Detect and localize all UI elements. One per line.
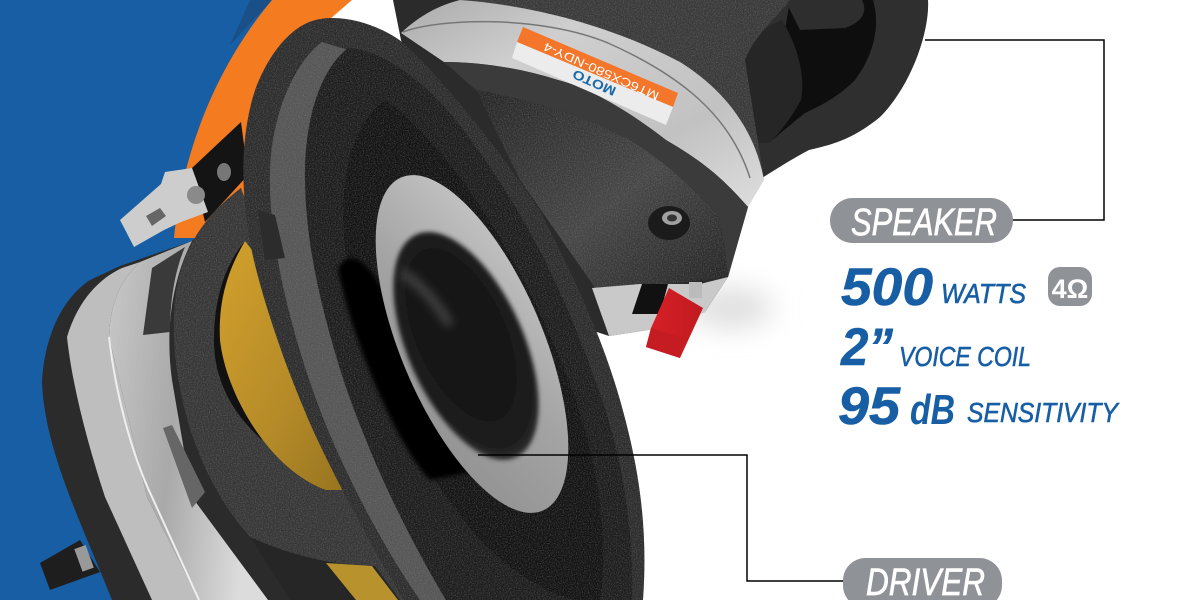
icon: 4 ohm badge: [1048, 267, 1092, 306]
product label: MOTO: [570, 67, 618, 99]
surround: [305, 48, 632, 600]
foam band: [270, 42, 450, 600]
black magnet plate: [42, 188, 410, 600]
callout line: speaker: [925, 40, 1104, 220]
icon: 4 ohm badge: 4Ω: [1052, 274, 1088, 304]
lower basket arm: [250, 537, 400, 600]
front speaker: rear magnet assembly: [40, 122, 420, 600]
matte silver band: [67, 262, 199, 600]
dust cap inner: [363, 211, 569, 481]
spec: 2 inch voice coil: 2”: [840, 318, 893, 377]
spec: 2 inch voice coil: VOICE COIL: [899, 341, 1031, 372]
lower terminal bracket: [592, 277, 728, 336]
left terminal connector: [120, 122, 248, 247]
callout line: driver: [478, 455, 843, 581]
spec: 500 watts: 500: [841, 258, 933, 317]
dark interior: [214, 241, 300, 440]
rear speaker: motor and label view: [393, 0, 928, 358]
outer gasket ring: [243, 18, 644, 600]
chrome ring band: [109, 241, 268, 600]
body silhouette: [393, 0, 790, 336]
front speaker: driver face: [243, 18, 644, 600]
product label: MT6CX580-NDY-4: [541, 39, 661, 103]
bottom-left lug: [40, 540, 100, 590]
dark cavity: [338, 258, 480, 480]
spec: 500 watts: WATTS: [941, 278, 1026, 309]
product label: [512, 27, 678, 125]
spec: 95 dB sensitivity: 95: [838, 377, 902, 436]
dust cap outer: [336, 150, 608, 538]
spec: 95 dB sensitivity: SENSITIVITY: [967, 397, 1120, 428]
woven cone: [343, 100, 603, 600]
textured dome: [476, 90, 728, 292]
speaker label pill: SPEAKER: [851, 202, 997, 244]
upper rough body: [445, 0, 790, 180]
spec: 95 dB sensitivity: [838, 377, 1120, 436]
cone notch: [258, 210, 285, 260]
floor shadow: [688, 288, 772, 328]
red terminal cap: [646, 288, 703, 358]
outer basket ring: [745, 0, 928, 178]
screw: [648, 206, 690, 240]
silver band: [401, 0, 764, 207]
cone shoulder: [737, 20, 802, 143]
basket opening: [769, 0, 876, 143]
basket frame: [174, 188, 420, 600]
spec: 500 watts: [841, 258, 1026, 317]
yellow spider: [220, 241, 350, 490]
dark rim: [444, 62, 748, 277]
spec: 95 dB sensitivity: dB: [910, 386, 955, 433]
spec: 2 inch voice coil: [840, 318, 1031, 377]
